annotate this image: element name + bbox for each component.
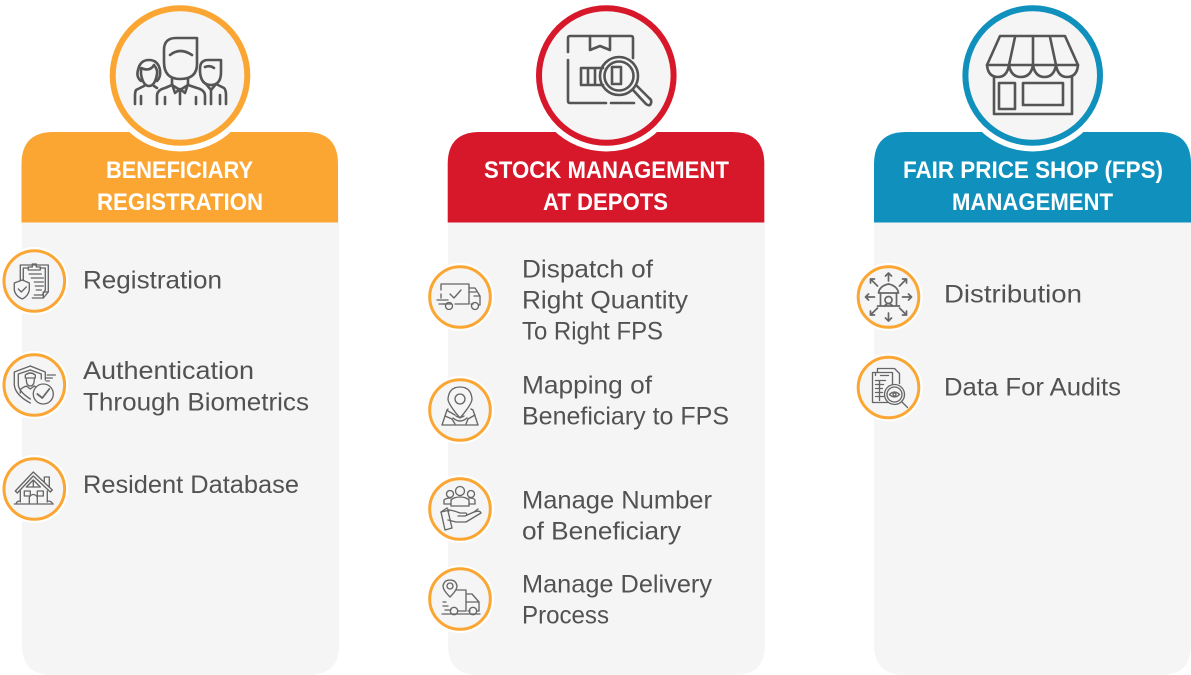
label: Mapping of xyxy=(522,372,652,400)
label: Authentication xyxy=(83,357,254,385)
heading: STOCK MANAGEMENT xyxy=(484,157,729,184)
label: To Right FPS xyxy=(522,318,663,346)
heading: MANAGEMENT xyxy=(952,189,1113,216)
header bar xyxy=(22,132,338,222)
heading: REGISTRATION xyxy=(97,189,263,216)
label: of Beneficiary xyxy=(522,518,682,546)
heading xyxy=(903,157,1163,216)
label xyxy=(522,570,712,630)
panel: fair price shop management xyxy=(854,0,1191,675)
header bar xyxy=(874,132,1191,222)
header bar xyxy=(448,132,764,222)
heading xyxy=(484,157,729,216)
label: Resident Database xyxy=(83,471,299,499)
label: Registration xyxy=(83,266,222,294)
label xyxy=(522,486,712,546)
panel: beneficiary registration xyxy=(0,0,339,675)
label xyxy=(522,256,689,346)
label: Process xyxy=(522,602,609,630)
icon: box under magnifier xyxy=(530,0,682,152)
list item: distribution xyxy=(854,263,1082,331)
list item: manage number of beneficiary xyxy=(426,475,712,546)
list item: manage delivery process xyxy=(426,565,712,633)
panel body xyxy=(22,200,339,675)
list item: resident database xyxy=(0,455,299,523)
label: Through Biometrics xyxy=(83,388,309,416)
heading: AT DEPOTS xyxy=(543,189,668,216)
label: Manage Number xyxy=(522,486,712,514)
heading: FAIR PRICE SHOP (FPS) xyxy=(903,157,1163,184)
panel: stock management at depots xyxy=(426,0,765,675)
icon: storefront xyxy=(957,0,1109,152)
label xyxy=(83,357,309,416)
list item: data for audits xyxy=(854,354,1121,422)
label xyxy=(522,372,729,430)
list item: mapping of beneficiary to fps xyxy=(426,372,729,444)
label: Manage Delivery xyxy=(522,570,712,598)
panel body xyxy=(874,200,1191,675)
heading xyxy=(97,157,263,216)
list item: dispatch of right quantity to right fps xyxy=(426,256,689,346)
icon: people group xyxy=(104,0,256,152)
list item: authentication through biometrics xyxy=(0,351,309,419)
label: Beneficiary to FPS xyxy=(522,402,729,430)
label: Right Quantity xyxy=(522,286,689,314)
heading: BENEFICIARY xyxy=(106,157,253,184)
label: Dispatch of xyxy=(522,256,653,284)
panel body xyxy=(448,200,765,675)
label: Data For Audits xyxy=(944,374,1121,402)
label: Distribution xyxy=(944,280,1082,308)
list item: registration xyxy=(0,247,222,315)
